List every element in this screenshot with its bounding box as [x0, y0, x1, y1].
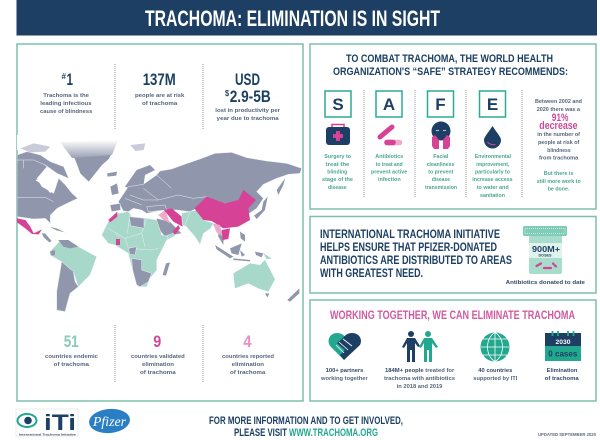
stat: number one cause: leading infectious: [40, 101, 92, 107]
logo: Pfizer: Pfizer: [92, 415, 127, 430]
stat: people at risk: [135, 70, 185, 107]
panel: working together: [310, 300, 596, 401]
people treated column: in 2018 and 2019: [397, 384, 442, 390]
column: antibiotics: infection: [378, 177, 401, 183]
stat: productivity loss: $: [225, 89, 229, 98]
callout: 91% decrease: in the number of: [537, 132, 580, 138]
stat: productivity loss: lost in productivity per: [215, 108, 281, 114]
column: facial cleanliness: cleanliness: [427, 162, 454, 168]
column: antibiotics: Antibiotics: [375, 154, 403, 160]
stat: endemic countries: countries endemic: [45, 354, 98, 360]
heading: ITI statement: [320, 227, 512, 280]
panel: International Trachoma Initiative: [310, 216, 596, 293]
countries supported column: [473, 332, 518, 382]
callout: 91% decrease: [535, 99, 583, 192]
partners column: working together: [320, 376, 369, 382]
logo: International Trachoma Initiative: iTi: [44, 410, 76, 435]
callout: 91% decrease: still more work to: [537, 179, 581, 185]
column: surgery: S: [332, 95, 344, 114]
logo: Pfizer: [88, 407, 131, 435]
stat: productivity loss: USD: [235, 70, 260, 89]
column: environmental improvement: E: [487, 95, 498, 114]
callout: 91% decrease: 91%: [552, 112, 569, 124]
icon: medical kit: [326, 124, 350, 145]
heading: SAFE strategy: TO COMBAT TRACHOMA, THE WORLD HEALTH: [346, 53, 553, 65]
footer call to action: [209, 415, 403, 439]
column: environmental improvement: to water and: [477, 185, 509, 191]
icon: calendar 2030 zero cases: 0 cases: [548, 348, 578, 358]
logo: International Trachoma Initiative: [16, 409, 78, 436]
column: environmental improvement: increase access: [472, 177, 513, 183]
people treated column: trachoma with antibiotics: [384, 376, 455, 382]
column: facial cleanliness: transmission: [425, 185, 458, 191]
panel: SAFE strategy: [310, 44, 596, 209]
stat: endemic countries: [45, 332, 98, 368]
heading: ITI statement: HELPS ENSURE THAT PFIZER-DONATED: [320, 240, 497, 254]
callout: 91% decrease: people at risk of: [538, 140, 579, 146]
callout: 91% decrease: be done.: [548, 186, 570, 192]
stat: productivity loss: [215, 70, 281, 122]
icon: antibiotic bottle 900M+ doses: DOSES: [538, 254, 552, 258]
eurasia: [110, 152, 302, 245]
stat: reported elimination: [222, 332, 275, 376]
column: facial cleanliness: to prevent: [428, 170, 453, 176]
stat: productivity loss: year due to trachoma: [217, 116, 280, 122]
column: environmental improvement: Environmental: [475, 154, 511, 160]
heading: ITI statement: ANTIBIOTICS ARE DISTRIBUTED TO AREAS: [320, 253, 512, 267]
icon: calendar 2030 zero cases: 2030: [556, 339, 571, 346]
column: facial cleanliness: disease: [432, 177, 450, 183]
stat: reported elimination: elimination: [232, 362, 265, 368]
heading: SAFE strategy: [333, 53, 568, 78]
column: facial cleanliness: F: [435, 95, 446, 114]
stat: validated elimination: countries validated: [131, 354, 185, 360]
callout: 91% decrease: But there is: [544, 171, 573, 177]
callout: 91% decrease: decrease: [539, 120, 578, 132]
column: antibiotics: to treat and: [376, 162, 403, 168]
column: environmental improvement: improvement,: [476, 162, 510, 168]
icon: antibiotic bottle 900M+ doses: [523, 226, 567, 274]
column: surgery: treat the: [326, 162, 349, 168]
footer call to action: PLEASE VISIT: [234, 427, 287, 439]
countries supported column: 40 countries: [478, 368, 512, 374]
stat: validated elimination: 9: [153, 332, 161, 351]
icon: two people: [402, 331, 438, 362]
partners column: [320, 333, 369, 382]
people treated column: 184M+ people treated for: [385, 368, 455, 374]
greenland with fading top: [74, 155, 111, 182]
icon: handshake heart: [329, 333, 361, 360]
icon: pills: [380, 127, 400, 142]
column: facial cleanliness: [425, 91, 458, 191]
stat: people at risk: people are at risk: [135, 93, 185, 99]
heading: ITI statement: WITH GREATEST NEED.: [320, 266, 423, 280]
elimination column: [545, 331, 581, 382]
column: surgery: blinding: [327, 170, 348, 176]
stat: reported elimination: 4: [243, 332, 252, 351]
footer call to action: WWW.TRACHOMA.ORG: [289, 427, 378, 439]
column: environmental improvement: [472, 91, 513, 199]
stat: number one cause: #: [62, 72, 67, 81]
column: facial cleanliness: Facial: [433, 154, 449, 160]
stat: productivity loss: 2.9-5B: [230, 87, 271, 106]
people treated column: [384, 331, 455, 390]
column: surgery: [322, 91, 353, 191]
elimination column: of trachoma: [545, 376, 580, 382]
title: TRACHOMA: ELIMINATION IS IN SIGHT: [145, 6, 440, 31]
column: environmental improvement: particularly to: [475, 170, 511, 176]
stat: number one cause: Trachoma is the: [43, 93, 89, 99]
north america and greenland: [17, 135, 145, 234]
southeast asia and oceania: [215, 232, 299, 302]
icon: globe: [480, 332, 510, 362]
column: surgery: Surgery to: [324, 154, 352, 160]
stat: endemic countries: of trachoma: [54, 362, 90, 368]
header banner: [16, 0, 597, 36]
stat: validated elimination: [131, 332, 185, 376]
world map: [17, 135, 302, 312]
column: surgery: stage of the: [322, 177, 353, 183]
countries supported column: supported by ITI: [473, 376, 518, 382]
column: environmental improvement: sanitation: [480, 193, 506, 199]
column: antibiotics: A: [383, 95, 395, 114]
icon: antibiotic bottle 900M+ doses: 900M+: [532, 245, 560, 254]
elimination column: Elimination: [547, 368, 578, 374]
stat: validated elimination: of trachoma: [140, 370, 177, 376]
stat: validated elimination: elimination: [142, 362, 175, 368]
column: surgery: disease: [328, 185, 347, 191]
stat: number one cause: 1: [66, 70, 73, 89]
icon: calendar 2030 zero cases: [545, 331, 581, 361]
column: antibiotics: prevent active: [371, 170, 407, 176]
caption: antibiotics donated: Antibiotics donated to date: [506, 280, 585, 286]
stat: people at risk: of trachoma: [142, 101, 178, 107]
stat: number one cause: [40, 70, 92, 115]
heading: ITI statement: INTERNATIONAL TRACHOMA INITIATIVE: [320, 227, 500, 241]
icon: washing face: [432, 122, 450, 149]
stat: reported elimination: of trachoma: [230, 370, 266, 376]
stat: number one cause: cause of blindness: [40, 109, 92, 115]
column: antibiotics: [371, 91, 407, 183]
callout: 91% decrease: 2020 there was a: [537, 107, 581, 113]
logo: International Trachoma Initiative: International Trachoma Initiative: [19, 432, 76, 436]
americas south and africa: [42, 212, 170, 312]
icon: water drop: [484, 126, 501, 148]
stat: endemic countries: 51: [64, 332, 79, 351]
footer call to action: FOR MORE INFORMATION AND TO GET INVOLVED,: [209, 415, 403, 427]
callout: 91% decrease: Between 2002 and: [535, 99, 583, 105]
panel: global statistics and map: [17, 44, 303, 401]
callout: 91% decrease: blindness: [547, 148, 571, 154]
callout: 91% decrease: from trachoma: [539, 156, 579, 162]
stat: people at risk: 137M: [143, 70, 176, 89]
partners column: 100+ partners: [326, 368, 363, 374]
stat: reported elimination: countries reported: [222, 354, 275, 360]
